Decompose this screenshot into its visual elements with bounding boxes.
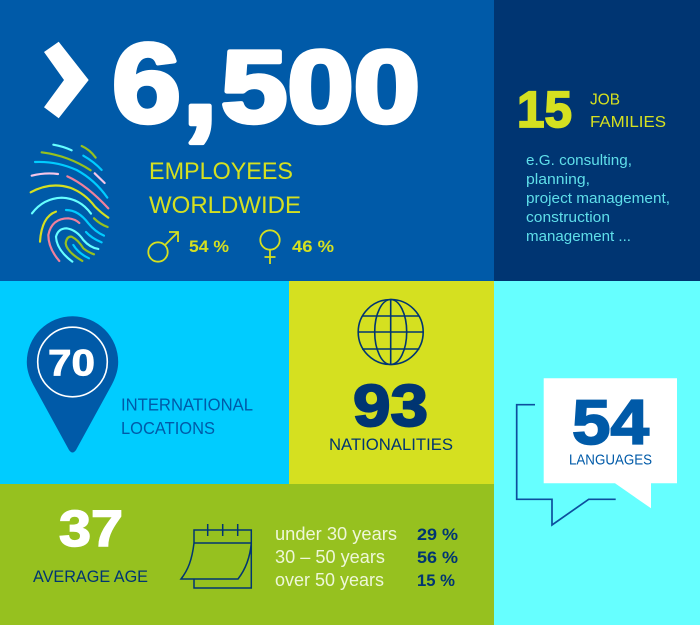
locations label: LOCATIONS <box>121 418 215 438</box>
languages label: LANGUAGES <box>569 453 652 469</box>
job families label <box>590 92 666 131</box>
pin ring <box>38 327 107 397</box>
age ranges: under 30 years <box>275 523 397 544</box>
nationalities label: NATIONALITIES <box>329 436 453 454</box>
age percentages: 15 % <box>417 571 455 590</box>
job families examples: construction <box>526 209 610 226</box>
panel: languages <box>494 281 700 625</box>
age ranges: 30 – 50 years <box>275 546 385 567</box>
nationalities number: 93 <box>353 373 428 439</box>
female share: 46 % <box>292 237 334 256</box>
speech bubble outline <box>517 405 616 525</box>
panel: locations <box>0 281 289 484</box>
job families examples: planning, <box>526 171 590 188</box>
job families examples <box>526 152 670 245</box>
headline number <box>112 14 420 150</box>
employees label <box>149 158 301 219</box>
employees label: EMPLOYEES <box>149 158 293 185</box>
speech bubble <box>544 378 677 508</box>
icon: calendar <box>181 524 251 588</box>
age ranges: over 50 years <box>275 569 384 590</box>
locations number: 70 <box>48 342 95 384</box>
job families examples: e.G. consulting, <box>526 152 632 169</box>
job families label: JOB <box>590 92 620 108</box>
icon: chevron greater-than <box>44 42 89 118</box>
age percentages: 56 % <box>417 548 458 567</box>
job families examples: management ... <box>526 228 631 245</box>
icon: map pin <box>27 316 118 452</box>
average age label: AVERAGE AGE <box>33 568 148 586</box>
job families number: 15 <box>517 81 572 138</box>
icon: fingerprint <box>31 145 108 262</box>
age ranges <box>275 523 397 590</box>
headline number: , <box>182 14 218 150</box>
locations label <box>121 394 253 438</box>
languages number: 54 <box>572 388 649 458</box>
panel: job families <box>494 0 700 281</box>
job families label: FAMILIES <box>590 114 666 131</box>
employees label: WORLDWIDE <box>149 192 301 219</box>
headline number: 500 <box>221 30 420 144</box>
job families examples: project management, <box>526 190 670 207</box>
age percentages <box>417 525 458 590</box>
locations label: INTERNATIONAL <box>121 394 253 414</box>
icon: male <box>148 232 178 262</box>
average age number: 37 <box>59 500 123 557</box>
icon: female <box>260 230 280 264</box>
icon: globe <box>358 300 423 364</box>
panel: average age <box>0 484 494 625</box>
headline number: 6 <box>112 21 181 146</box>
age percentages: 29 % <box>417 525 458 544</box>
panel: employees <box>0 0 494 281</box>
panel: nationalities <box>289 281 494 484</box>
male share: 54 % <box>189 237 229 256</box>
